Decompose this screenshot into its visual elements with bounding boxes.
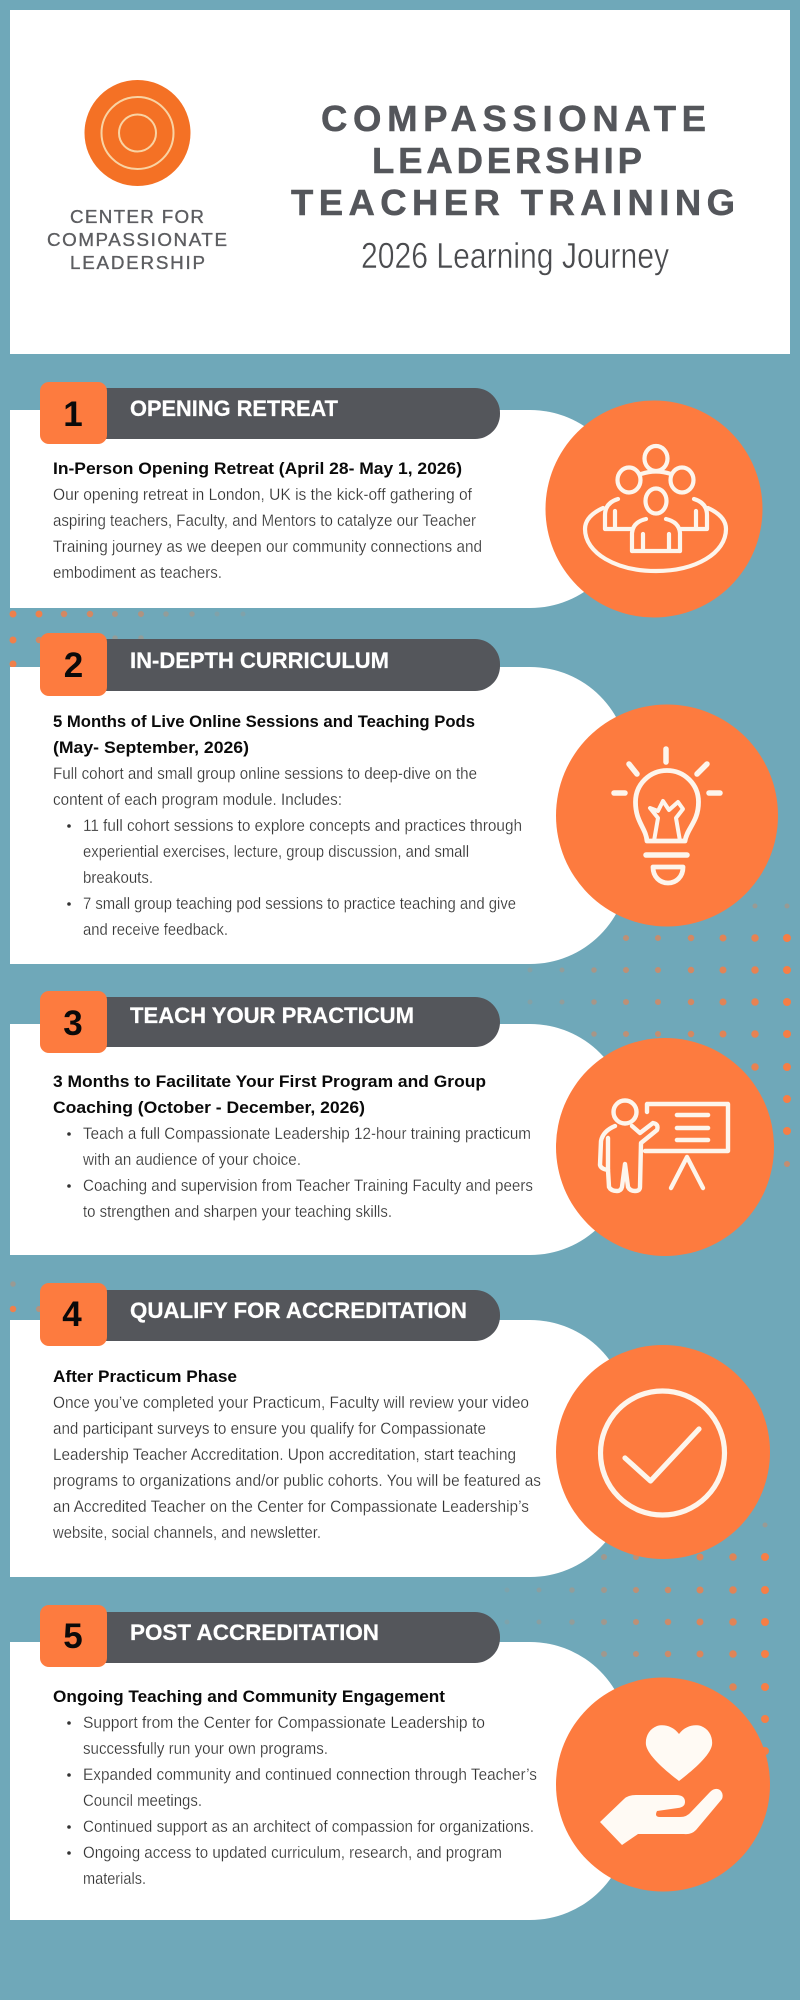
icon: hand holding heart <box>600 1725 723 1845</box>
step header bar <box>60 1290 500 1341</box>
panel: step 2 in-depth curriculum <box>10 633 778 964</box>
step heading: IN-DEPTH CURRICULUM <box>130 648 389 673</box>
step number: 2 <box>64 646 83 685</box>
logo text: LEADERSHIP <box>70 252 205 273</box>
step text: 7 small group teaching pod sessions to practice teaching and give <box>83 894 516 913</box>
step text: Coaching (October - December, 2026) <box>53 1099 365 1117</box>
step text: Support from the Center for Compassionate Leadership to <box>83 1713 485 1732</box>
step text: Ongoing Teaching and Community Engagement <box>53 1688 446 1706</box>
panel: step 3 teach your practicum <box>10 991 774 1256</box>
step text: Ongoing access to updated curriculum, research, and program <box>83 1843 502 1862</box>
step text: materials. <box>83 1869 146 1888</box>
step header bar <box>60 1612 500 1663</box>
title: LEADERSHIP <box>372 140 642 181</box>
step number <box>40 1283 107 1346</box>
icon: group around table <box>585 446 726 571</box>
panel: step 5 post accreditation <box>10 1605 770 1920</box>
step text: embodiment as teachers. <box>53 563 222 582</box>
step text: Once you’ve completed your Practicum, Faculty will review your video <box>53 1393 529 1412</box>
step text: aspiring teachers, Faculty, and Mentors to catalyze our Teacher <box>53 511 476 530</box>
step text: breakouts. <box>83 868 153 887</box>
title <box>291 98 735 223</box>
logo text: COMPASSIONATE <box>47 229 227 250</box>
step text: 3 Months to Facilitate Your First Program and Group <box>53 1073 486 1091</box>
title: TEACHER TRAINING <box>291 182 735 223</box>
step text: with an audience of your choice. <box>82 1150 301 1169</box>
step text: (May- September, 2026) <box>53 739 249 757</box>
step text: Continued support as an architect of compassion for organizations. <box>83 1817 534 1836</box>
step text: website, social channels, and newsletter. <box>52 1523 321 1542</box>
step text <box>53 460 482 582</box>
step text: Coaching and supervision from Teacher Training Faculty and peers <box>83 1176 533 1195</box>
step number <box>40 382 107 444</box>
step text: programs to organizations and/or public cohorts. You will be featured as <box>53 1471 541 1490</box>
step text: After Practicum Phase <box>53 1368 237 1386</box>
step text: 11 full cohort sessions to explore concepts and practices through <box>83 816 522 835</box>
panel: header <box>10 10 790 354</box>
step number: 1 <box>63 395 83 434</box>
step text: experiential exercises, lecture, group discussion, and small <box>83 842 469 861</box>
icon: teacher at board <box>600 1100 728 1191</box>
step text: 5 Months of Live Online Sessions and Teaching Pods <box>53 713 475 731</box>
step header bar <box>60 639 500 691</box>
step header bar <box>60 997 500 1047</box>
step number <box>40 633 107 696</box>
step text: Training journey as we deepen our community connections and <box>53 537 482 556</box>
step heading: POST ACCREDITATION <box>130 1620 379 1645</box>
logo: concentric circles <box>84 80 190 186</box>
step number <box>40 991 107 1053</box>
panel: step 4 qualify for accreditation <box>10 1283 770 1577</box>
step heading: OPENING RETREAT <box>130 396 338 421</box>
step text: Leadership Teacher Accreditation. Upon accreditation, start teaching <box>53 1445 516 1464</box>
step text: Full cohort and small group online sessions to deep-dive on the <box>53 764 477 783</box>
step text: Council meetings. <box>83 1791 202 1810</box>
step text: Teach a full Compassionate Leadership 12-hour training practicum <box>83 1124 531 1143</box>
icon: check mark in circle <box>600 1391 724 1515</box>
dot pattern: right middle <box>530 906 787 1164</box>
step text: content of each program module. Includes: <box>53 790 342 809</box>
step text: to strengthen and sharpen your teaching skills. <box>83 1202 392 1221</box>
logo text: CENTER FOR <box>70 206 204 227</box>
step heading: TEACH YOUR PRACTICUM <box>130 1003 414 1028</box>
step text <box>53 1073 533 1221</box>
step number: 5 <box>63 1617 83 1656</box>
step number: 3 <box>63 1004 83 1043</box>
step heading: QUALIFY FOR ACCREDITATION <box>130 1298 467 1323</box>
step text <box>53 1688 537 1888</box>
icon: light bulb <box>614 749 720 883</box>
step number <box>40 1605 107 1667</box>
dot pattern: left <box>13 614 243 1309</box>
step text: Expanded community and continued connection through Teacher’s <box>83 1765 537 1784</box>
step text: and receive feedback. <box>83 920 228 939</box>
step text: successfully run your own programs. <box>83 1739 328 1758</box>
logo text <box>47 206 227 273</box>
subtitle: 2026 Learning Journey <box>361 235 669 276</box>
panel: step 1 opening retreat <box>10 382 762 618</box>
step text <box>52 1368 541 1542</box>
step header bar <box>60 388 500 439</box>
step text: and participant surveys to ensure you qualify for Compassionate <box>53 1419 486 1438</box>
step number: 4 <box>62 1295 82 1334</box>
title: COMPASSIONATE <box>321 98 706 139</box>
step text <box>53 713 522 939</box>
step text: Our opening retreat in London, UK is the kick-off gathering of <box>53 485 472 504</box>
dot pattern: right lower <box>507 1525 765 1751</box>
step text: an Accredited Teacher on the Center for Compassionate Leadership’s <box>53 1497 529 1516</box>
step text: In-Person Opening Retreat (April 28- May 1, 2026) <box>53 460 462 478</box>
